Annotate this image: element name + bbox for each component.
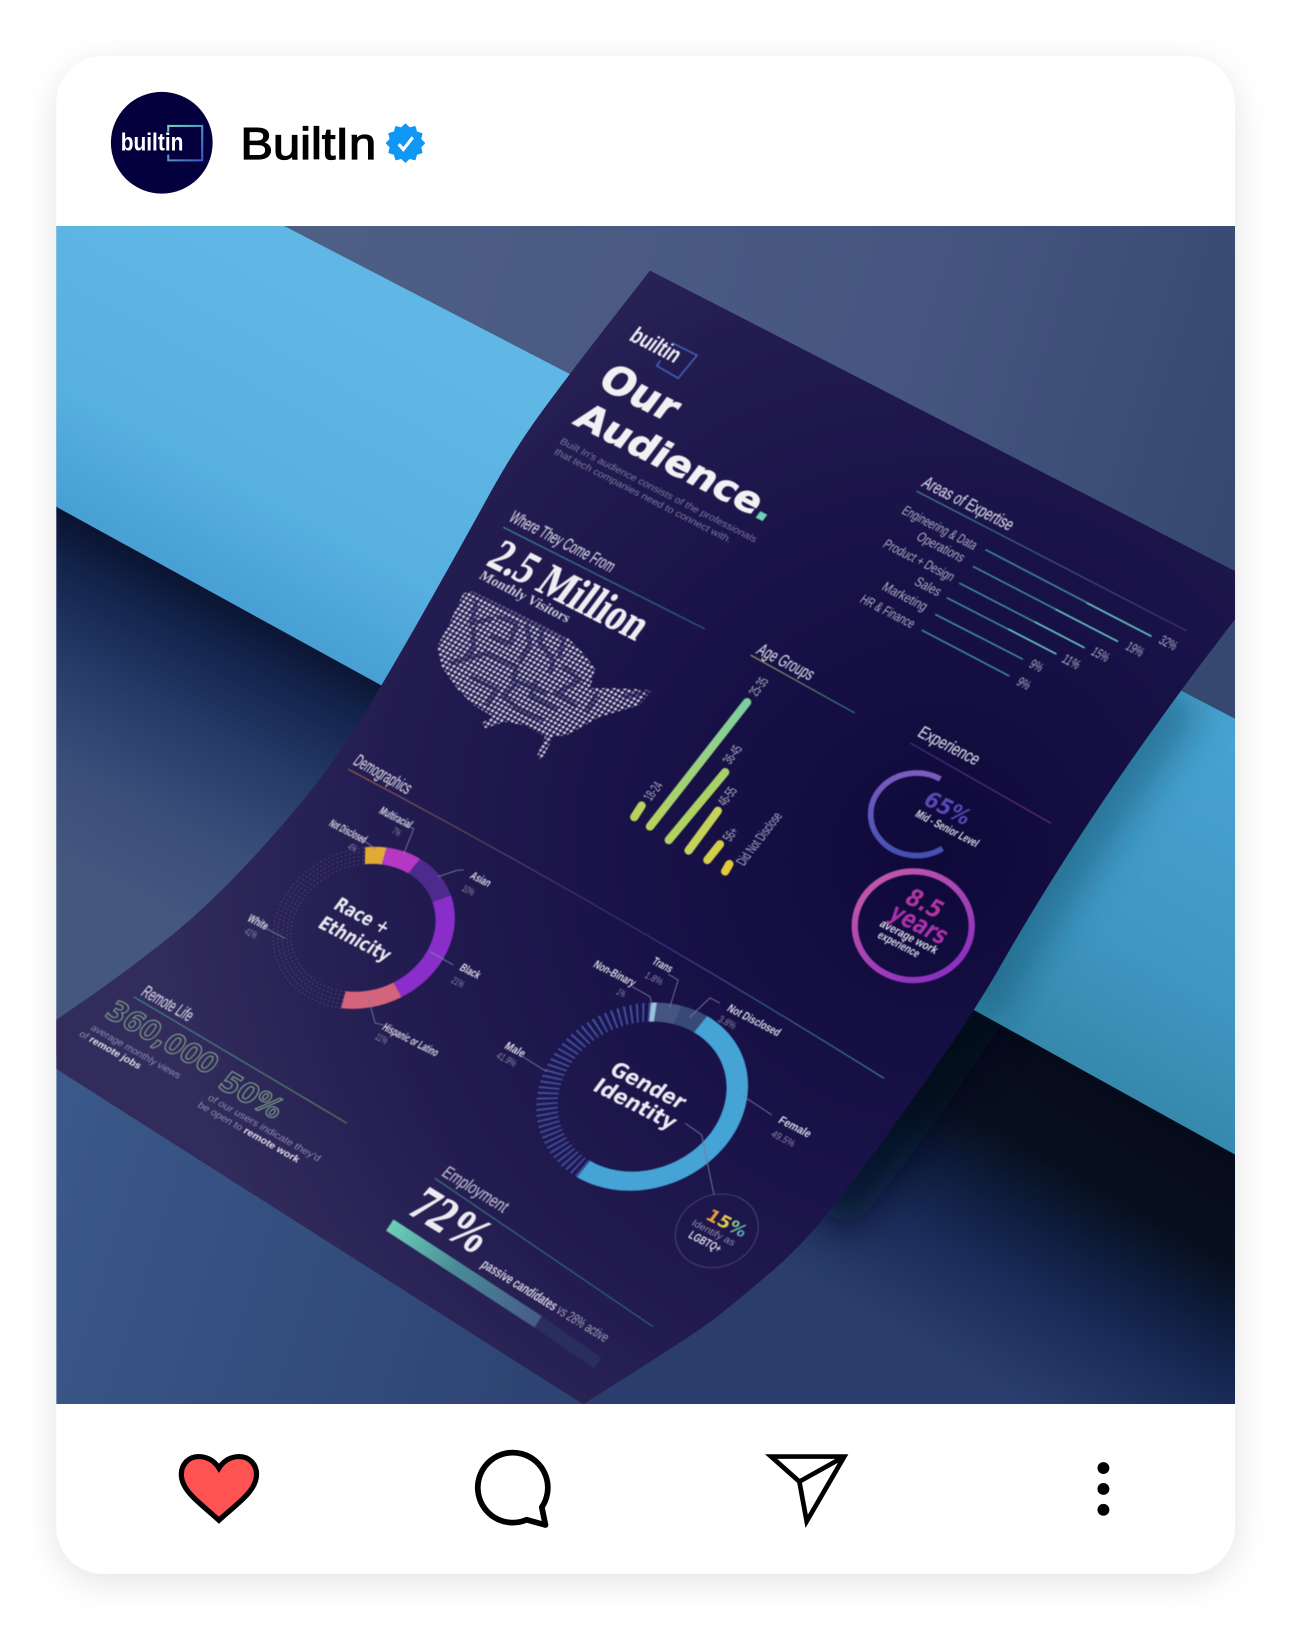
race centre label: Race + — [329, 894, 395, 939]
intro text: that tech companies need to connect with. — [552, 447, 734, 546]
white segment: dotted arc — [272, 847, 365, 1008]
employment caption: passive candidates vs 28% active — [477, 1257, 612, 1345]
icon: comment bubble — [478, 1453, 548, 1525]
gender labels: Female — [776, 1113, 815, 1140]
race centre label — [318, 896, 392, 964]
photo: poster mockup on blue tube — [56, 226, 1235, 1404]
expertise labels: HR & Finance — [857, 591, 919, 631]
poster content — [77, 323, 1187, 1363]
expertise values: 19% — [1123, 638, 1148, 659]
sheet logo: builtin — [624, 323, 687, 368]
expertise labels — [857, 503, 981, 631]
stat: 360,000: 360,000 — [99, 995, 226, 1080]
title: Our — [590, 355, 691, 431]
title: Audience. — [566, 395, 787, 530]
section: demographics: Demographics — [350, 750, 417, 798]
section: remote life — [77, 981, 347, 1165]
age labels — [639, 675, 786, 868]
donut chart: race and ethnicity — [244, 806, 492, 1057]
avatar: BuiltIn logo — [111, 92, 213, 194]
gender labels: Trans — [649, 955, 676, 975]
age labels: 46-55 — [714, 784, 740, 808]
gender labels — [493, 955, 815, 1150]
ring: 8.5 years average work experience: 8.5 — [899, 883, 950, 924]
male segment: hatched arc — [536, 1002, 652, 1178]
race labels: Hispanic or Latino — [380, 1020, 442, 1059]
race leader lines — [263, 826, 464, 1025]
expertise values: 9% — [1014, 674, 1035, 693]
callout: 15% identify as LGBTQ+: 15% — [701, 1206, 752, 1242]
race labels: 21% — [449, 976, 466, 990]
gender centre label: Identity — [588, 1075, 682, 1135]
race labels: 4% — [345, 842, 359, 855]
gender leader lines — [522, 974, 772, 1195]
race labels: Not Disclosed — [326, 817, 370, 846]
gender labels: 41.9% — [493, 1051, 519, 1069]
section: remote life: Remote Life — [138, 981, 199, 1025]
race labels: Asian — [467, 869, 494, 890]
section: areas of expertise — [857, 472, 1187, 693]
age labels: 36-45 — [719, 742, 746, 766]
section: where they come from: 2.5 Million — [478, 531, 661, 650]
race labels: White — [245, 912, 272, 933]
gender labels: 1.8% — [642, 971, 665, 988]
account name: BuiltIn — [240, 118, 376, 169]
age labels: 18-24 — [639, 779, 666, 803]
bar chart: age groups — [634, 702, 747, 871]
section: age groups — [634, 639, 855, 871]
gender labels: 49.5% — [768, 1129, 797, 1150]
expertise values: 11% — [1059, 651, 1084, 672]
gender labels: Non-Binary — [591, 958, 639, 989]
icon: more options — [1097, 1462, 1109, 1516]
section: areas of expertise: Areas of Expertise — [918, 472, 1019, 534]
icon: verified badge — [387, 124, 424, 162]
section: where they come from: Monthly Visitors — [476, 568, 574, 626]
section: age groups: Age Groups — [753, 639, 820, 684]
age labels: 56+ — [719, 825, 742, 844]
progress bar: passive vs active — [390, 1225, 598, 1363]
ring: 8.5 years average work experience: average work — [877, 917, 941, 957]
callout: 15% identify as LGBTQ+ — [659, 1181, 775, 1281]
ring: 8.5 years average work experience: experience — [875, 928, 923, 960]
section: experience: Experience — [914, 722, 985, 769]
action bar — [181, 1453, 1109, 1525]
section: employment — [390, 1162, 653, 1363]
note: remote work: be open to remote work — [195, 1100, 302, 1165]
gender labels: 1% — [614, 987, 628, 1000]
race labels: Black — [457, 961, 484, 982]
race labels: 10% — [459, 884, 477, 898]
expertise values — [1016, 635, 1178, 690]
section: employment: Employment — [438, 1162, 514, 1216]
note: monthly views: average monthly views — [88, 1023, 183, 1081]
icon: heart — [181, 1457, 257, 1520]
race labels: 41% — [242, 927, 259, 941]
age labels: 25-35 — [745, 675, 772, 698]
expertise labels: Product + Design — [880, 536, 959, 584]
gender labels: 3.8% — [715, 1014, 738, 1032]
ring: 65% mid-senior level: 65% — [918, 787, 976, 830]
race centre label: Ethnicity — [314, 912, 396, 966]
expertise values: 9% — [1026, 656, 1047, 675]
callout: 15% identify as LGBTQ+: LGBTQ+ — [686, 1228, 725, 1255]
expertise bars — [922, 550, 1151, 676]
ring: 65% mid-senior level: Mid - Senior Level — [912, 807, 982, 850]
expertise labels: Engineering & Data — [899, 503, 981, 552]
callout: 15% identify as LGBTQ+: Identify as — [689, 1218, 737, 1248]
race labels: Multiracial — [376, 804, 416, 831]
expertise labels: Sales — [911, 574, 945, 599]
expertise labels: Marketing — [879, 579, 931, 614]
section: experience — [855, 722, 1051, 980]
intro text: Built In's audience consists of the professionals — [557, 437, 759, 545]
ring: 8.5 years average work experience — [855, 871, 972, 980]
gender labels: Not Disclosed — [724, 1002, 784, 1039]
ring: 8.5 years average work experience: years — [883, 899, 955, 951]
race labels: 7% — [389, 826, 403, 839]
avatar: BuiltIn logo: builtin — [121, 128, 183, 156]
stat: 50%: 50% — [212, 1066, 291, 1125]
note: monthly views: of remote jobs — [77, 1029, 144, 1072]
expertise values: 15% — [1088, 644, 1114, 665]
section: demographics — [348, 750, 884, 1078]
poster sheet — [56, 271, 1235, 1404]
race labels: 11% — [372, 1032, 390, 1047]
section: where they come from: Where They Come From — [505, 507, 620, 576]
ring: 65% mid-senior level — [871, 773, 982, 856]
expertise values: 32% — [1156, 632, 1182, 653]
icon: send plane — [771, 1457, 844, 1521]
note: remote work: of our users indicate they'd — [205, 1093, 323, 1164]
gender centre label: Gender — [605, 1058, 691, 1114]
dot map of the United States — [437, 591, 652, 760]
age labels: Did Not Disclose — [732, 810, 786, 868]
expertise labels: Operations — [914, 529, 969, 565]
gender labels: Male — [502, 1039, 529, 1060]
race labels — [242, 804, 494, 1059]
donut chart: gender identity — [496, 956, 812, 1269]
stat: 72%: 72% — [398, 1178, 506, 1265]
